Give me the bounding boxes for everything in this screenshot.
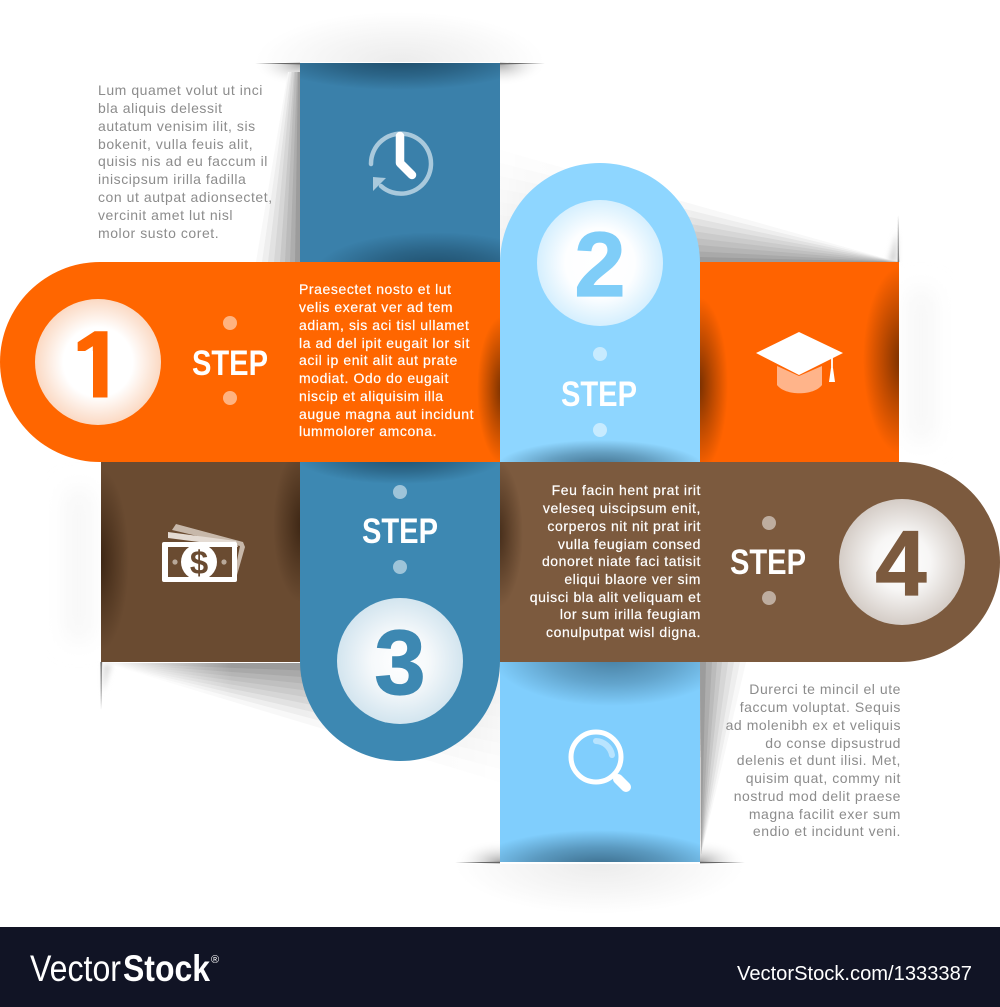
text block: top left: quisis nis ad eu faccum il: [98, 153, 268, 169]
icon: magnifier: [571, 732, 626, 787]
icon: number 3 disc: [337, 598, 463, 724]
icon: number 4 disc: [839, 499, 965, 625]
text block: top left: autatum venisim ilit, sis: [98, 118, 256, 134]
text block: step 1: velis exerat ver ad tem: [299, 299, 453, 315]
text block: bottom right: faccum voluptat. Sequis: [740, 699, 901, 715]
text block: step 4: eliqui blaore ver sim: [564, 571, 701, 587]
text block: top left: [98, 82, 273, 241]
text block: bottom right: endio et incidunt veni.: [753, 823, 901, 839]
text block: top left: vercinit amet lut nisl: [98, 207, 233, 223]
text block: step 4: lor sum irilla feugiam: [560, 606, 701, 622]
step 1 label: [192, 316, 268, 405]
text block: step 1: la ad del ipit eugait lor sit: [299, 335, 470, 351]
icon: number 2 disc: 2: [574, 214, 626, 316]
footer id: VectorStock.com/1333387: [737, 963, 972, 985]
text block: bottom right: [726, 681, 901, 839]
text block: step 4: vulla feugiam consed: [558, 536, 701, 552]
icon: clock: [371, 134, 431, 194]
text block: step 1: adiam, sis aci tisl ullamet: [299, 317, 470, 333]
icon: number 4 disc: 4: [875, 513, 927, 615]
text block: bottom right: do conse dipsustrud: [765, 735, 901, 751]
fan lower left: [102, 662, 500, 787]
text block: step 4: conulputpat wisl digna.: [546, 624, 701, 640]
step 1 label: STEP: [192, 344, 268, 383]
text block: bottom right: magna facilit exer sum: [749, 806, 901, 822]
text block: step 4: donoret niate faci tatisit: [542, 553, 701, 569]
panel: brown square with money icon: [101, 462, 300, 662]
text block: step 1: niscip et aliquisim illa: [299, 388, 444, 404]
text block: bottom right: quisim quat, commy nit: [746, 770, 901, 786]
panel: light blue strip bottom with magnifier icon: [500, 662, 700, 862]
icon: number 1 disc: [35, 299, 161, 425]
text block: step 1: Praesectet nosto et lut: [299, 281, 452, 297]
panel: step 2 light blue pill: [500, 163, 700, 462]
text block: top left: Lum quamet volut ut inci: [98, 82, 263, 98]
text block: bottom right: delenis et dunt ilisi. Met,: [737, 752, 901, 768]
fan lower right: [700, 662, 746, 855]
step 3 label: [362, 485, 438, 574]
text block: step 1: [299, 281, 474, 439]
text block: step 1: lummolorer amcona.: [299, 423, 437, 439]
text block: step 4: corperos nit nit prat irit: [547, 518, 701, 534]
icon: number 2 disc: [537, 200, 663, 326]
panel: step 4 brown band: [471, 460, 1000, 662]
icon: money: [162, 524, 245, 582]
step 4 label: [730, 516, 806, 605]
icon: graduation cap: [756, 332, 843, 393]
text block: bottom right: ad molenibh ex et veliquis: [726, 717, 901, 733]
text block: step 1: acil ip enit alit aut prate: [299, 352, 458, 368]
panel: step 1 orange band: [0, 262, 529, 464]
panel: blue strip top with clock icon: [300, 63, 500, 262]
step 2 label: [561, 347, 637, 437]
text block: step 4: veleseq uiscipsum enit,: [543, 500, 701, 516]
text block: bottom right: Durerci te mincil el ute: [749, 681, 901, 697]
logo: VectorStock: ®: [211, 954, 219, 966]
text block: top left: iniscipsum irilla fadilla: [98, 171, 246, 187]
text block: step 1: modiat. Odo do eugait: [299, 370, 449, 386]
text block: bottom right: nostrud mod delit praese: [734, 788, 901, 804]
text block: step 4: [530, 482, 701, 640]
text block: step 1: augue magna aut incidunt: [299, 406, 474, 422]
fan upper left: [256, 72, 300, 262]
text block: top left: molor susto coret.: [98, 225, 219, 241]
step 3 label: STEP: [362, 512, 438, 551]
text block: top left: bla aliquis delessit: [98, 100, 223, 116]
panel: orange square with graduation cap icon: [700, 262, 899, 462]
icon: money: $: [190, 544, 208, 581]
paper shadows: [68, 12, 932, 914]
text block: top left: bokenit, vulla feuis alit,: [98, 136, 253, 152]
icon: number 3 disc: 3: [374, 612, 426, 714]
panel: step 3 blue pill: [300, 462, 500, 761]
footer bar: [0, 927, 1000, 1007]
icon: number 1 disc: 1: [73, 314, 124, 416]
text block: step 4: Feu facin hent prat irit: [552, 482, 701, 498]
step 4 label: STEP: [730, 543, 806, 582]
step 2 label: STEP: [561, 375, 637, 414]
text block: top left: con ut autpat adionsectet,: [98, 189, 273, 205]
text block: step 4: quisci bla alit veliquam et: [530, 589, 701, 605]
logo: VectorStock: Stock: [123, 948, 210, 989]
logo: VectorStock: Vector: [30, 948, 121, 989]
fan top right: [500, 140, 898, 262]
logo: VectorStock: [30, 948, 219, 989]
